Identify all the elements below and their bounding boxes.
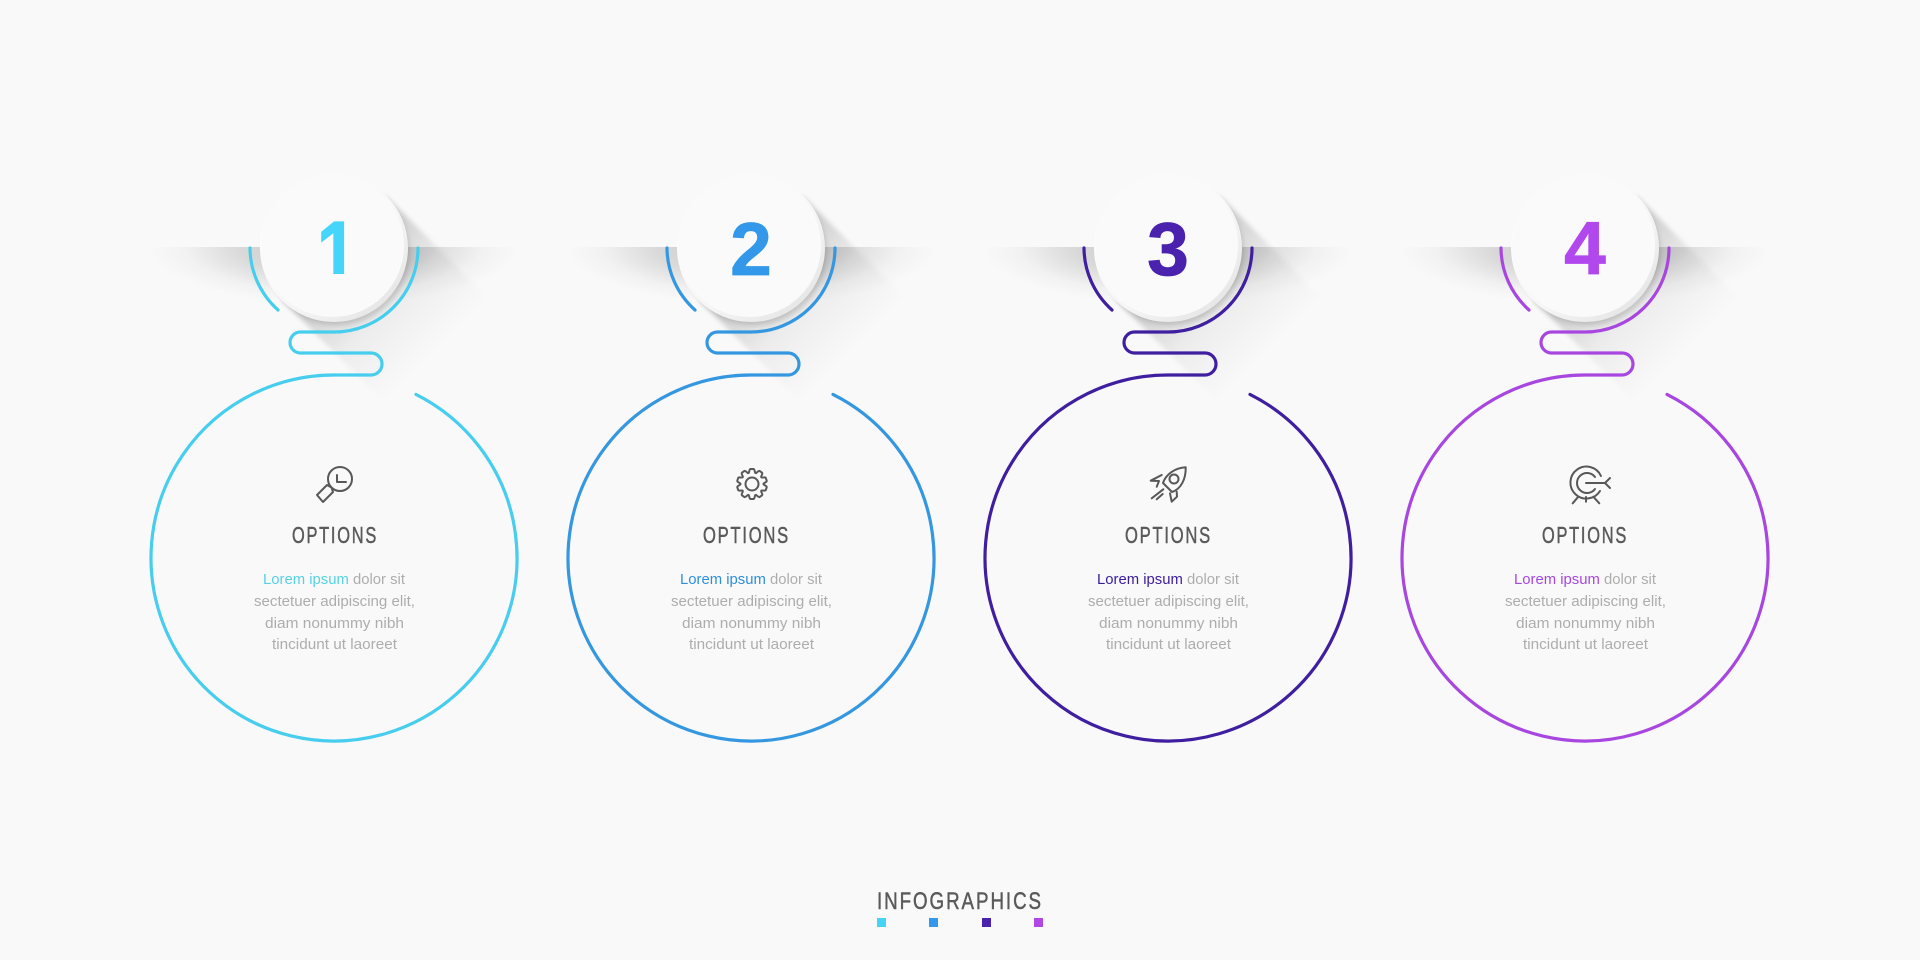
step 3: [982, 174, 1354, 741]
body text: tincidunt ut laoreet: [1106, 636, 1232, 653]
body text: tincidunt ut laoreet: [689, 636, 815, 653]
icon: gear: [737, 469, 767, 499]
body text: [1088, 571, 1249, 653]
icon: target with arrow: [1570, 467, 1610, 503]
body text: sectetuer adipiscing elit,: [254, 593, 415, 610]
step 1 shadow: [148, 196, 520, 434]
heading: options: OPTIONS: [1542, 522, 1628, 548]
body text: [671, 571, 832, 653]
step 1 number badge: [260, 196, 410, 327]
body text: sectetuer adipiscing elit,: [671, 593, 832, 610]
heading: options: OPTIONS: [1125, 522, 1212, 548]
heading: options: OPTIONS: [292, 522, 378, 548]
body text: diam nonummy nibh: [1516, 615, 1655, 632]
step 2: [565, 174, 937, 741]
body text: Lorem ipsum dolor sit: [1514, 571, 1657, 588]
body text: tincidunt ut laoreet: [1523, 636, 1649, 653]
step 2 connector line and ring: [568, 248, 934, 741]
body text: tincidunt ut laoreet: [272, 636, 398, 653]
body text: [1505, 571, 1666, 653]
step 1: [148, 174, 520, 741]
body text: Lorem ipsum dolor sit: [680, 571, 823, 588]
step 2 number badge: [677, 174, 826, 325]
step 4 connector line and ring: [1402, 248, 1768, 741]
step 4 number badge: [1511, 174, 1660, 325]
number 3: 3: [1147, 207, 1189, 291]
icon: rocket: [1151, 467, 1186, 502]
step 2 shadow: [565, 196, 937, 434]
heading: options: OPTIONS: [703, 522, 790, 548]
step 4: [1399, 174, 1771, 741]
body text: [254, 571, 415, 653]
body text: sectetuer adipiscing elit,: [1505, 593, 1666, 610]
body text: diam nonummy nibh: [1099, 615, 1238, 632]
number 2: 2: [730, 207, 772, 291]
step 1 connector line and ring: [151, 248, 517, 741]
step 3 number badge: [1094, 174, 1243, 325]
footer colour squares: [877, 918, 1043, 927]
body text: diam nonummy nibh: [682, 615, 821, 632]
step 4 shadow: [1399, 196, 1771, 434]
body text: sectetuer adipiscing elit,: [1088, 593, 1249, 610]
icon: magnifier with clock: [317, 467, 352, 502]
body text: Lorem ipsum dolor sit: [263, 571, 406, 588]
number 1: 1: [317, 202, 357, 305]
step 3 connector line and ring: [985, 248, 1351, 741]
number 4: 4: [1564, 206, 1606, 290]
footer title: INFOGRAPHICS: [877, 888, 1043, 915]
body text: Lorem ipsum dolor sit: [1097, 571, 1240, 588]
step 3 shadow: [982, 196, 1354, 434]
body text: diam nonummy nibh: [265, 615, 404, 632]
